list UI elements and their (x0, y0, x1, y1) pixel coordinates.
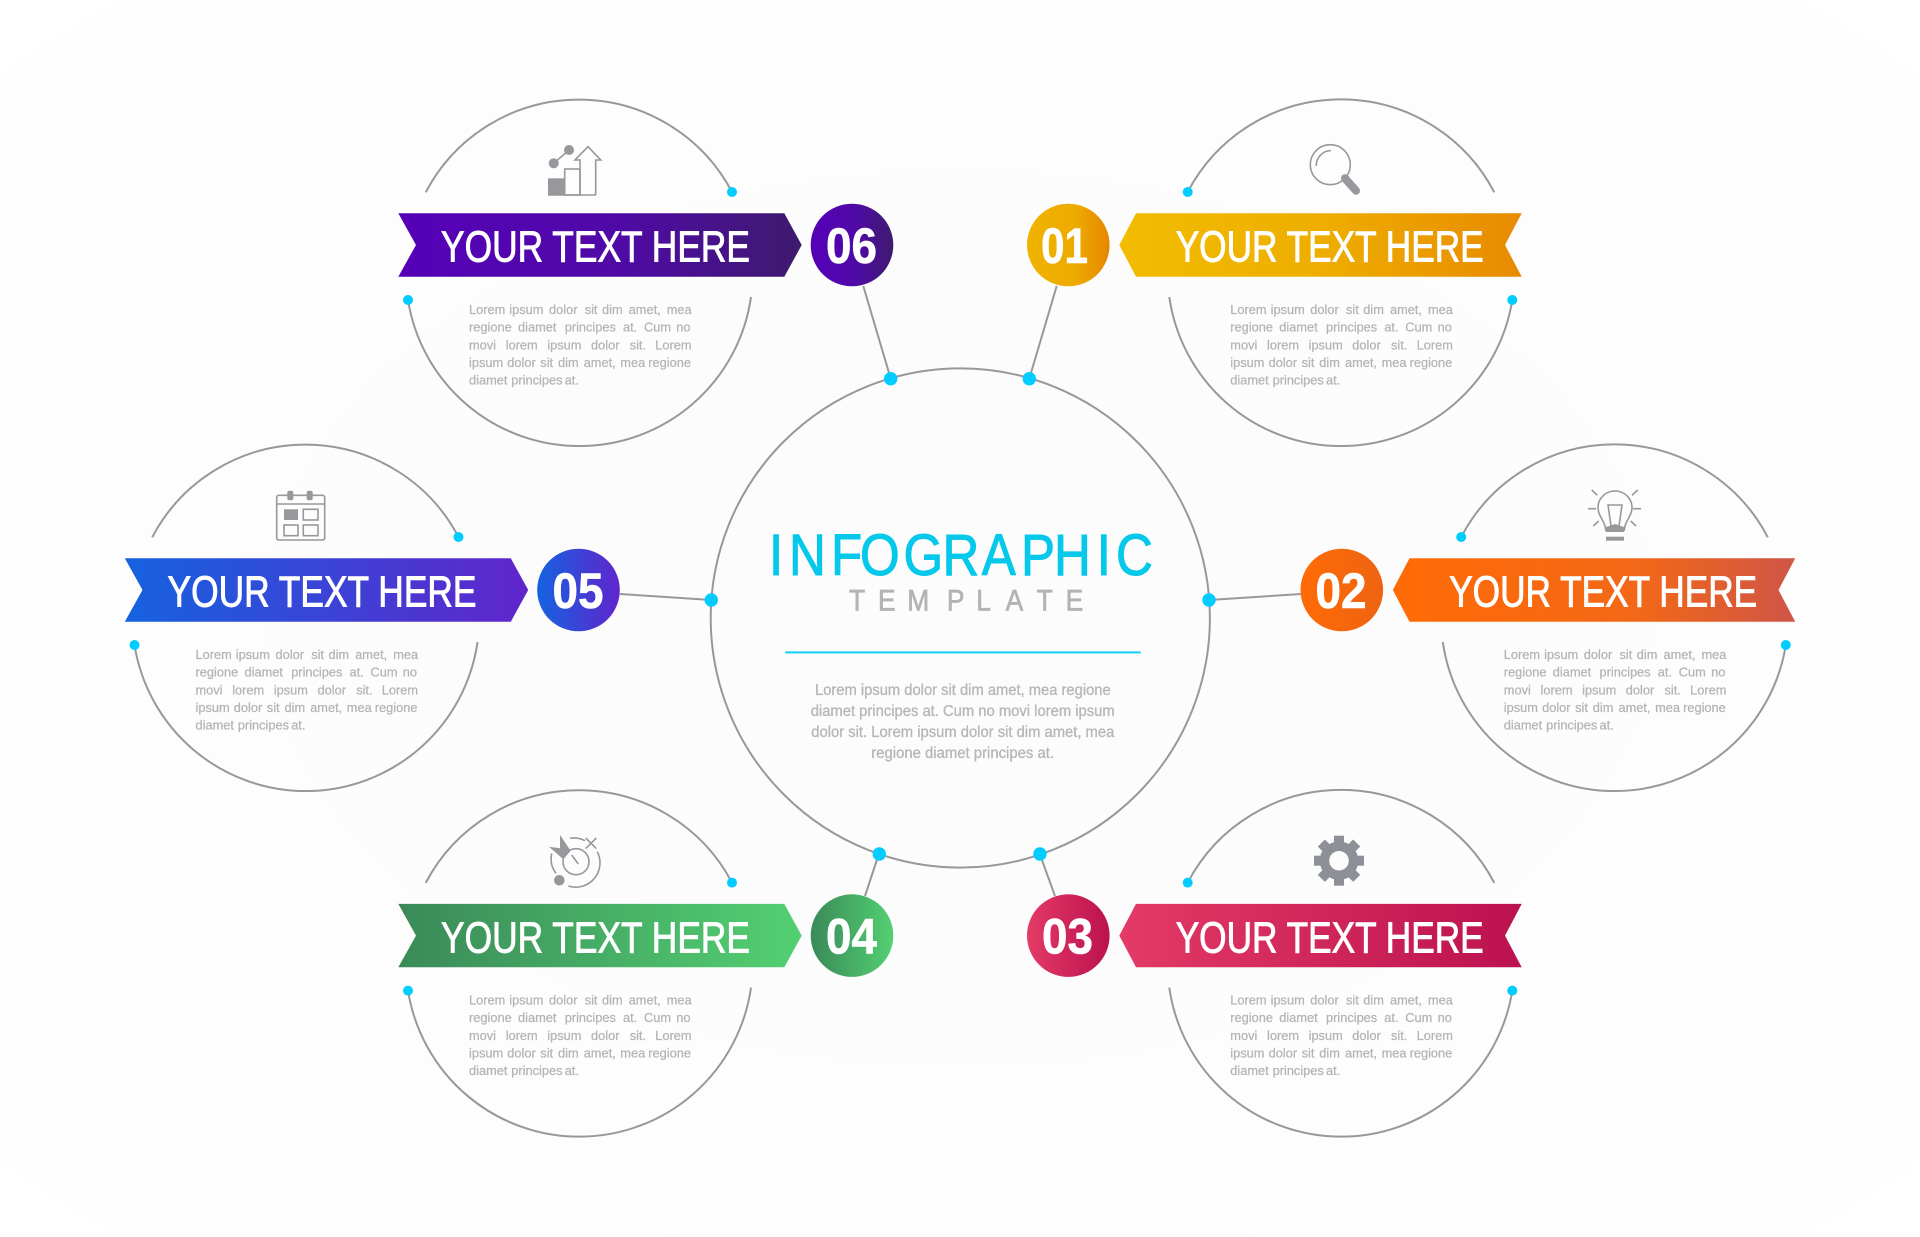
text block: dolor (591, 337, 620, 352)
number badge 02 (1300, 549, 1383, 631)
central description: dolor sit. Lorem ipsum dolor sit dim amet, mea (811, 724, 1115, 741)
text block: Cum (644, 320, 671, 335)
text block: amet, (1619, 700, 1651, 715)
central circle (711, 368, 1210, 868)
text block: movi (1230, 1028, 1257, 1043)
subtitle: TEMPLATE (849, 583, 1083, 617)
text block: diamet (1230, 373, 1269, 388)
text block: dim (1363, 993, 1384, 1008)
text block: dim (1319, 355, 1340, 370)
number badge 01: 01 (1041, 218, 1088, 274)
ribbon 06 (398, 213, 802, 277)
text block: principes (511, 1063, 563, 1078)
text block: dim (328, 647, 349, 662)
text block: lorem (506, 337, 538, 352)
text block: diamet (469, 373, 508, 388)
text block: principes (291, 665, 342, 680)
text block: lorem (1541, 682, 1573, 697)
text block: sit. (630, 1028, 646, 1043)
text block: mea (667, 302, 692, 317)
text block: ipsum (469, 1046, 503, 1061)
text block: at. (1384, 320, 1399, 335)
text block: no (1711, 665, 1725, 680)
text block: Lorem (655, 1028, 692, 1043)
text block: regione (648, 1046, 691, 1061)
text block: dolor (507, 355, 536, 370)
icon: calendar (277, 491, 325, 540)
text block: Lorem (1690, 682, 1726, 697)
text block: Cum (1405, 1010, 1432, 1025)
text block: principes (1600, 665, 1651, 680)
text block: mea (1655, 700, 1681, 715)
text block: principes (511, 373, 563, 388)
text block: ipsum (1230, 1046, 1264, 1061)
text block: Cum (370, 665, 398, 680)
text block: diamet (196, 718, 234, 733)
text block: ipsum (236, 647, 270, 662)
panel: 06 (398, 100, 893, 446)
connector dots (705, 372, 1216, 861)
text block: diamet (518, 1010, 557, 1025)
text block: regione (469, 1010, 512, 1025)
text block: regione (1683, 700, 1726, 715)
text block: sit (1620, 647, 1633, 662)
text block: mea (1382, 355, 1407, 370)
text block: sit (1575, 700, 1588, 715)
text block: sit (1346, 993, 1359, 1008)
text block: ipsum (1544, 647, 1578, 662)
text block: Lorem (1504, 647, 1540, 662)
central description: diamet principes at. Cum no movi lorem ipsum (811, 703, 1115, 720)
number badge 05: 05 (552, 563, 604, 619)
text block: lorem (1267, 1028, 1299, 1043)
ribbon label: YOUR TEXT HERE (441, 224, 750, 272)
text block: dolor (591, 1028, 620, 1043)
number badge 01 (1027, 204, 1110, 286)
text block: no (1438, 1010, 1452, 1025)
text block: regione (1230, 1010, 1273, 1025)
text block: principes (1546, 718, 1597, 733)
text block: Lorem (469, 302, 505, 317)
text block: Cum (644, 1010, 671, 1025)
central description (811, 682, 1115, 762)
text block: dolor (234, 700, 263, 715)
text block: dim (1593, 700, 1613, 715)
text block: dolor (1352, 337, 1381, 352)
text block: Lorem (196, 647, 232, 662)
text block: at. (1658, 665, 1672, 680)
text block: amet, (1390, 993, 1422, 1008)
text block: amet, (629, 302, 661, 317)
central description: Lorem ipsum dolor sit dim amet, mea regione (815, 682, 1111, 699)
text block: mea (1428, 993, 1454, 1008)
text block: mea (393, 647, 419, 662)
text block: dolor (1584, 647, 1613, 662)
text block: at. (291, 718, 305, 733)
text block: diamet (1553, 665, 1592, 680)
central description: regione diamet principes at. (871, 745, 1054, 762)
icon: target (549, 835, 600, 887)
text block: amet, (629, 993, 661, 1008)
text block: dolor (549, 302, 578, 317)
text block: lorem (506, 1028, 538, 1043)
ribbon label: YOUR TEXT HERE (1449, 569, 1757, 617)
text block: amet, (310, 700, 342, 715)
text block: diamet (1504, 718, 1543, 733)
text block: Lorem (1230, 993, 1267, 1008)
text block: dolor (1352, 1028, 1381, 1043)
text block: dolor (318, 682, 347, 697)
number badge 06: 06 (826, 218, 877, 274)
text block: ipsum (196, 700, 230, 715)
text block: ipsum (1309, 1028, 1343, 1043)
text block: Lorem (382, 682, 418, 697)
ribbon label: YOUR TEXT HERE (1176, 914, 1484, 962)
text block: regione (1410, 355, 1452, 370)
number badge 06 (811, 204, 893, 286)
text block: sit. (1391, 1028, 1407, 1043)
panel: 05 (125, 445, 620, 791)
text block: sit. (630, 337, 646, 352)
text block: sit (540, 1046, 554, 1061)
text block: dolor (1310, 993, 1339, 1008)
text block: Cum (1679, 665, 1706, 680)
text block: no (676, 1010, 691, 1025)
ribbon label: YOUR TEXT HERE (441, 914, 750, 962)
text block: ipsum (1271, 302, 1305, 317)
divider line (785, 651, 1141, 653)
text block: amet, (584, 355, 616, 370)
text block: dim (1363, 302, 1384, 317)
text block: sit (540, 355, 554, 370)
text block: amet, (1390, 302, 1422, 317)
text block: dim (558, 355, 579, 370)
text block: mea (620, 355, 646, 370)
text block: regione (375, 700, 418, 715)
ribbon 04 (398, 904, 802, 967)
text block: ipsum (1309, 337, 1343, 352)
text block: ipsum (1271, 993, 1305, 1008)
text block: sit (585, 302, 598, 317)
text block: movi (1504, 682, 1531, 697)
number badge 04 (811, 894, 893, 977)
text block: at. (565, 1063, 579, 1078)
text block: ipsum (547, 1028, 581, 1043)
text block: principes (565, 320, 616, 335)
text block: dim (1637, 647, 1657, 662)
text block: dim (602, 993, 623, 1008)
text block: sit (267, 700, 280, 715)
text block: sit. (1665, 682, 1681, 697)
text block: diamet (1230, 1063, 1269, 1078)
text block: Lorem (655, 337, 692, 352)
text block: dolor (1626, 682, 1655, 697)
text block: dim (1319, 1046, 1340, 1061)
text block: at. (623, 1010, 637, 1025)
text block: ipsum (547, 337, 581, 352)
text block: dim (284, 700, 305, 715)
text block: ipsum (509, 993, 543, 1008)
text block: at. (1326, 1063, 1340, 1078)
text block: mea (1702, 647, 1727, 662)
text block: ipsum (469, 355, 503, 370)
text block: no (1438, 320, 1452, 335)
text block: ipsum (1230, 355, 1264, 370)
text block: amet, (355, 647, 387, 662)
text block: dim (602, 302, 623, 317)
text block: principes (1273, 1063, 1324, 1078)
text block: dolor (1542, 700, 1571, 715)
text block: diamet (1279, 320, 1318, 335)
text block: mea (347, 700, 373, 715)
ribbon 02 (1393, 558, 1795, 622)
text block: mea (620, 1046, 646, 1061)
text block: Lorem (1417, 337, 1453, 352)
text block: dolor (549, 993, 578, 1008)
text block: at. (1384, 1010, 1399, 1025)
icon: gear (1314, 836, 1364, 886)
text block: diamet (518, 320, 557, 335)
text block: regione (648, 355, 691, 370)
text block: dolor (1310, 302, 1339, 317)
text block: mea (1428, 302, 1454, 317)
text block: sit (1302, 1046, 1315, 1061)
text block: sit (311, 647, 324, 662)
text block: movi (469, 337, 496, 352)
ribbon label: YOUR TEXT HERE (168, 569, 476, 617)
text block: amet, (1345, 355, 1377, 370)
text block: at. (565, 373, 579, 388)
text block: regione (1504, 665, 1547, 680)
text block: amet, (584, 1046, 616, 1061)
text block: diamet (244, 665, 283, 680)
number badge 05 (537, 549, 620, 631)
text block: no (676, 320, 691, 335)
text block: Lorem (469, 993, 505, 1008)
text block: sit. (356, 682, 373, 697)
text block: amet, (1664, 647, 1696, 662)
ribbon label: YOUR TEXT HERE (1176, 224, 1484, 272)
text block: dolor (276, 647, 305, 662)
text block: lorem (232, 682, 264, 697)
panel: 02 (1300, 444, 1795, 791)
icon: growth chart (548, 145, 601, 195)
text block: no (403, 665, 417, 680)
text block: at. (623, 320, 637, 335)
text block: principes (1326, 1010, 1377, 1025)
text block: Lorem (1230, 302, 1267, 317)
text block: ipsum (1504, 700, 1538, 715)
connector lines (620, 286, 1301, 896)
icon: magnifier (1310, 145, 1356, 191)
text block: ipsum (1582, 682, 1616, 697)
ribbon 05 (125, 558, 528, 622)
text block: at. (1326, 373, 1340, 388)
text block: regione (1410, 1046, 1452, 1061)
text block: dolor (507, 1046, 536, 1061)
text block: diamet (469, 1063, 508, 1078)
number badge 04: 04 (826, 909, 877, 965)
text block: at. (350, 665, 364, 680)
text block: dim (558, 1046, 579, 1061)
text block: dolor (1269, 1046, 1298, 1061)
title: INFOGRAPHIC (769, 523, 1153, 588)
icon: light bulb (1588, 490, 1641, 541)
ribbon 03 (1119, 904, 1522, 967)
text block: principes (565, 1010, 616, 1025)
text block: principes (1326, 320, 1377, 335)
text block: sit (1346, 302, 1359, 317)
text block: regione (469, 320, 512, 335)
text block: principes (1273, 373, 1324, 388)
text block: movi (196, 682, 223, 697)
text block: regione (196, 665, 238, 680)
text block: mea (1382, 1046, 1407, 1061)
text block: amet, (1345, 1046, 1377, 1061)
ribbon 01 (1119, 213, 1522, 277)
text block: mea (667, 993, 692, 1008)
number badge 02: 02 (1316, 563, 1366, 619)
text block: Cum (1405, 320, 1432, 335)
text block: dolor (1269, 355, 1298, 370)
text block: ipsum (509, 302, 543, 317)
text block: regione (1230, 320, 1273, 335)
number badge 03: 03 (1042, 909, 1093, 965)
panel: 03 (1027, 790, 1522, 1137)
text block: sit (1302, 355, 1315, 370)
panel: 01 (1027, 99, 1522, 446)
panel: 04 (398, 790, 893, 1137)
text block: principes (238, 718, 289, 733)
text block: Lorem (1417, 1028, 1453, 1043)
text block: movi (469, 1028, 496, 1043)
text block: ipsum (274, 682, 308, 697)
text block: lorem (1267, 337, 1299, 352)
number badge 03 (1027, 894, 1110, 977)
text block: sit. (1391, 337, 1407, 352)
text block: diamet (1279, 1010, 1318, 1025)
text block: movi (1230, 337, 1257, 352)
text block: at. (1600, 718, 1614, 733)
text block: sit (585, 993, 598, 1008)
